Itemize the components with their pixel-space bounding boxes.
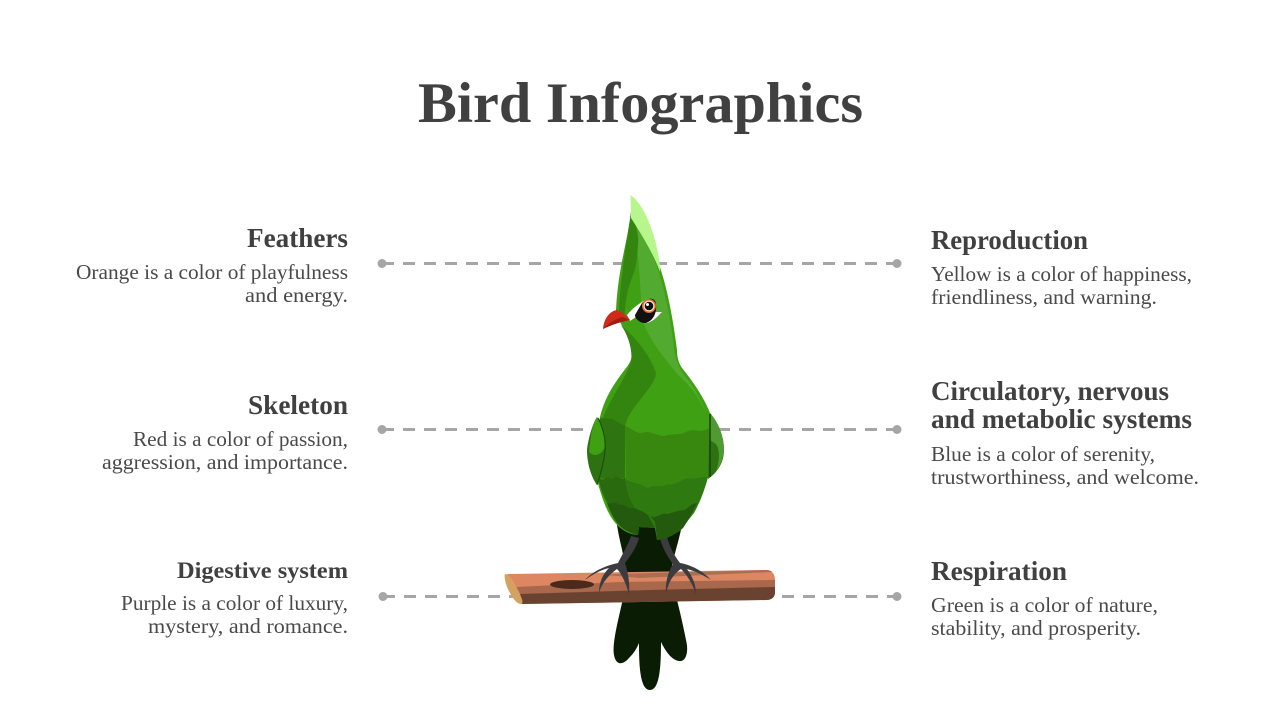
block: circulatory, nervous and metabolic systems: and metabolic systems (931, 404, 1192, 434)
block: respiration: stability, and prosperity. (931, 616, 1141, 640)
block: reproduction: Reproduction (931, 225, 1088, 255)
crest highlight (630, 195, 660, 272)
block: reproduction: Yellow is a color of happiness, (931, 262, 1192, 286)
lower dark feathers left (607, 503, 655, 535)
block: skeleton: Red is a color of passion, (133, 427, 348, 451)
block: circulatory, nervous and metabolic systems: Blue is a color of serenity, (931, 442, 1155, 466)
connector: feathers to reproduction (378, 259, 902, 268)
highlight on head (633, 222, 706, 413)
right claw (660, 536, 711, 594)
left side dark band (597, 418, 625, 478)
block: feathers: Orange is a color of playfulness (76, 260, 348, 284)
belly second band (625, 477, 708, 528)
block: circulatory, nervous and metabolic systems: trustworthiness, and welcome. (931, 465, 1199, 489)
title: Bird Infographics (418, 72, 863, 135)
block: digestive system (121, 558, 348, 638)
branch knot (550, 580, 594, 589)
lower dark feathers right (650, 503, 697, 540)
branch (505, 570, 775, 604)
block: skeleton: aggression, and importance. (102, 450, 348, 474)
block: reproduction: friendliness, and warning. (931, 285, 1157, 309)
block: circulatory, nervous and metabolic systems (931, 376, 1199, 489)
block: feathers: and energy. (245, 283, 348, 307)
block: respiration: Respiration (931, 556, 1067, 586)
left wing (587, 417, 605, 485)
block: skeleton: Skeleton (248, 390, 348, 420)
block: digestive system: Digestive system (177, 558, 348, 583)
block: respiration (931, 556, 1158, 640)
block: reproduction (931, 225, 1192, 309)
block: digestive system: mystery, and romance. (148, 614, 348, 638)
tail feathers (614, 525, 687, 690)
connector: digestive to respiration (378, 592, 902, 601)
right wing (708, 413, 724, 479)
beak (603, 310, 630, 329)
left claw (585, 536, 639, 594)
belly left dark band (598, 476, 640, 516)
block: digestive system: Purple is a color of luxury, (121, 591, 348, 615)
block: feathers: Feathers (247, 223, 348, 253)
belly mid band (625, 426, 709, 488)
block: circulatory, nervous and metabolic systems: Circulatory, nervous (931, 376, 1169, 406)
dark neck and side stripe (598, 325, 656, 530)
dark head stripe (619, 212, 638, 322)
connector: skeleton to circulatory (378, 425, 902, 434)
eye (627, 299, 662, 323)
block: feathers (76, 223, 348, 307)
block: respiration: Green is a color of nature, (931, 593, 1158, 617)
block: skeleton (102, 390, 348, 474)
body (595, 212, 712, 540)
illustration: green bird on branch (505, 195, 775, 690)
